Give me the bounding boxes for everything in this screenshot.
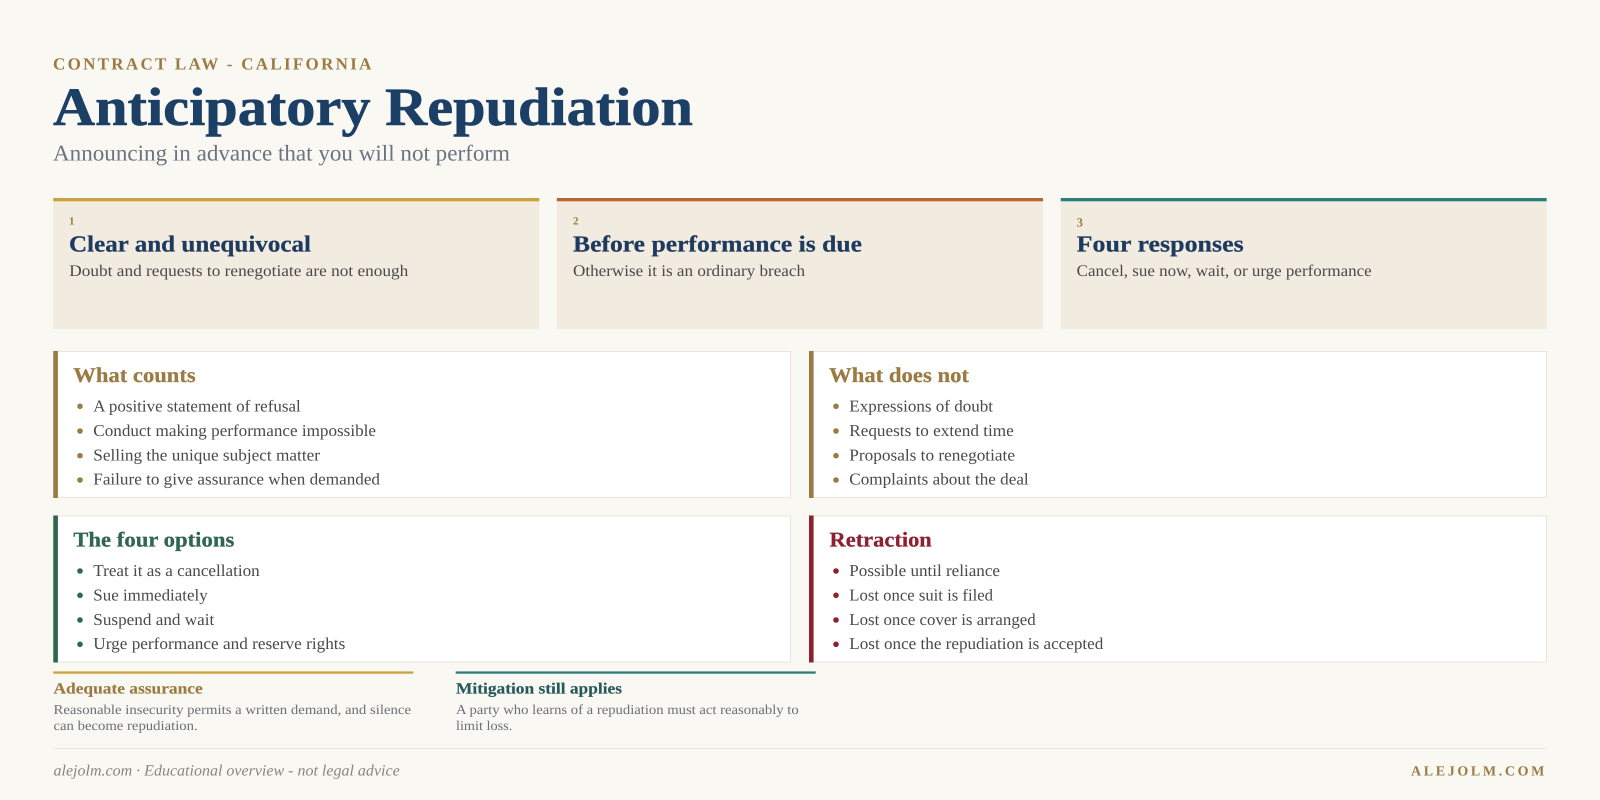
panel number: 3 xyxy=(1077,216,1083,230)
bullet list: Selling the unique subject matter xyxy=(93,445,320,464)
bullet list: Complaints about the deal xyxy=(849,470,1029,489)
card heading: The four options xyxy=(73,528,234,552)
card: retraction xyxy=(809,516,1546,662)
panel: four responses xyxy=(1061,198,1547,329)
bullet list: Proposals to renegotiate xyxy=(849,445,1015,464)
panel text: Cancel, sue now, wait, or urge performance xyxy=(1077,261,1372,280)
panel heading: Before performance is due xyxy=(573,232,862,257)
card: the four options xyxy=(53,516,791,662)
panel: before performance is due xyxy=(557,198,1043,329)
eyebrow: CONTRACT LAW - CALIFORNIA xyxy=(53,54,374,73)
bullet list: Lost once the repudiation is accepted xyxy=(849,634,1104,653)
bullet list: Requests to extend time xyxy=(849,421,1014,440)
note heading: Adequate assurance xyxy=(54,680,203,697)
note: adequate assurance xyxy=(53,671,413,733)
card heading: Retraction xyxy=(830,528,932,552)
bullet list: Urge performance and reserve rights xyxy=(93,634,345,653)
bullet list: Possible until reliance xyxy=(849,561,1000,580)
bullet list: Lost once suit is filed xyxy=(849,585,994,604)
bullet list: Treat it as a cancellation xyxy=(93,561,260,580)
bullet list: Lost once cover is arranged xyxy=(849,610,1036,629)
card: what counts xyxy=(53,351,791,498)
note text: Reasonable insecurity permits a written demand, and silence xyxy=(54,702,411,717)
note: adequate assurance: can become repudiation. xyxy=(54,718,198,733)
card: what does not xyxy=(809,351,1546,498)
note: mitigation still applies: limit loss. xyxy=(456,718,512,733)
panel heading: Clear and unequivocal xyxy=(69,232,311,257)
bullet list xyxy=(77,561,345,653)
card heading: What does not xyxy=(829,363,969,387)
footer brand: ALEJOLM.COM xyxy=(1411,765,1547,780)
bullet list xyxy=(833,397,1029,489)
note text: A party who learns of a repudiation must act reasonably to xyxy=(456,702,799,717)
subtitle: Announcing in advance that you will not perform xyxy=(53,140,510,166)
panel number: 1 xyxy=(69,215,74,227)
footer note: alejolm.com · Educational overview - not legal advice xyxy=(54,763,400,780)
bullet list: Failure to give assurance when demanded xyxy=(93,470,381,489)
bullet list: Suspend and wait xyxy=(93,610,215,629)
bullet list: A positive statement of refusal xyxy=(93,397,301,416)
panel text: Doubt and requests to renegotiate are not enough xyxy=(69,261,408,280)
bullet list: Sue immediately xyxy=(93,585,208,604)
note: mitigation still applies xyxy=(456,671,816,733)
panel text: Otherwise it is an ordinary breach xyxy=(573,261,805,280)
panel heading: Four responses xyxy=(1077,232,1244,257)
panel number: 2 xyxy=(573,215,579,227)
card heading: What counts xyxy=(73,363,196,387)
bullet list: Expressions of doubt xyxy=(849,397,993,416)
bullet list: Conduct making performance impossible xyxy=(93,421,376,440)
note heading: Mitigation still applies xyxy=(456,680,622,697)
title: Anticipatory Repudiation xyxy=(53,77,693,137)
bullet list xyxy=(77,397,381,489)
bullet list xyxy=(833,561,1104,653)
header xyxy=(53,54,693,166)
panel: clear and unequivocal xyxy=(53,198,539,329)
